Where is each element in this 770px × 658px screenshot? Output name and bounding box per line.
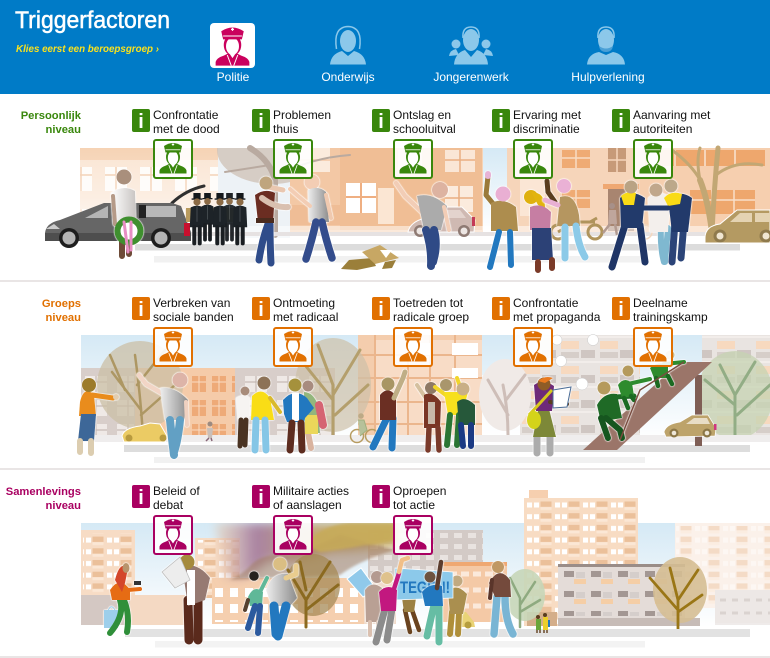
figure: child: [245, 571, 267, 633]
info item: Militaire acties of aanslagen: of aanslagen: [273, 498, 342, 512]
info item: Deelname trainingskamp: trainingskamp: [633, 310, 708, 324]
divider: [0, 280, 770, 282]
info item: Confrontatie met propaganda: [492, 296, 601, 366]
info item: Confrontatie met de dood: [132, 108, 220, 178]
figure: man blue with brown jacket: [373, 372, 405, 448]
figure: woman in orange: [78, 378, 119, 453]
distant walker: [603, 203, 617, 235]
far low building: [715, 590, 770, 623]
info item: Problemen thuis: i: [258, 111, 264, 133]
info item: Ontmoeting met radicaal: met radicaal: [273, 310, 338, 324]
panel: samenlevings niveau: [6, 484, 770, 648]
info item: Confrontatie met de dood: i: [138, 111, 144, 133]
street scene background row 2: [81, 335, 770, 440]
tree row 3 tan: [286, 554, 340, 627]
ramp: [583, 362, 712, 450]
info item: Ervaring met discriminatie: [492, 108, 582, 178]
info item: Militaire acties of aanslagen: [252, 484, 349, 554]
tab: Politie: Politie: [217, 70, 250, 84]
distant walker: [206, 422, 213, 441]
figure: brown protester in back: [402, 594, 419, 632]
info item: Aanvaring met autoriteiten: i: [618, 111, 624, 133]
info item: Verbreken van sociale banden: sociale banden: [153, 310, 234, 324]
level label: groeps: Groeps: [42, 298, 81, 310]
info item: Ervaring met discriminatie: discriminatie: [513, 122, 580, 136]
tab: Politie: [210, 23, 255, 84]
tree row 2 grey: [479, 359, 531, 435]
figure group: three people talking: [236, 376, 323, 450]
info item: Deelname trainingskamp: i: [618, 299, 624, 321]
info item: Ontslag en schooluitval: Ontslag en: [393, 108, 451, 122]
ground stripes row 1: [135, 232, 770, 262]
info item: Confrontatie met de dood: Confrontatie: [153, 108, 219, 122]
info item: Ervaring met discriminatie: Ervaring met: [513, 108, 582, 122]
panel: groeps niveau: [42, 296, 770, 463]
level label: persoonlijk: Persoonlijk: [21, 110, 82, 122]
car: tan row 2: [664, 415, 716, 438]
figure: waving man grey: [396, 182, 449, 266]
tab: Hulpverlening: [571, 27, 645, 84]
info item: Confrontatie met de dood: met de dood: [153, 122, 220, 136]
info item: Confrontatie met propaganda: i: [498, 299, 504, 321]
info item: Deelname trainingskamp: Deelname: [633, 296, 688, 310]
info item: Confrontatie met propaganda: Confrontatie: [513, 296, 579, 310]
green tree row 3: [505, 569, 545, 627]
figure: man reading newspaper: [162, 554, 210, 640]
info item: Ontmoeting met radicaal: Ontmoeting: [273, 296, 335, 310]
info item: Beleid of debat: debat: [153, 498, 184, 512]
low apartment block: [558, 564, 700, 626]
figure: woman with tablet: [527, 377, 571, 453]
level label: persoonlijk: niveau: [46, 124, 81, 136]
panel: persoonlijk niveau: [21, 108, 770, 270]
info item: Aanvaring met autoriteiten: Aanvaring met: [633, 108, 711, 122]
info item: Ontmoeting met radicaal: [252, 296, 338, 366]
street scene background row 3: [81, 523, 770, 627]
data bubbles: [552, 334, 598, 390]
info item: Militaire acties of aanslagen: i: [258, 487, 264, 509]
protest sign TEGEN: TEGEN!: [400, 578, 450, 597]
figure: man in blue: [422, 562, 443, 642]
info item: Ontslag en schooluitval: i: [378, 111, 384, 133]
hearse: [45, 186, 204, 248]
divider: [0, 656, 770, 658]
divider: [0, 468, 770, 470]
instruction: Klies eerst een beroepsgroep ›: [16, 43, 159, 55]
title: Triggerfactoren: [15, 7, 170, 34]
car: tan right: [705, 210, 770, 243]
info item: Oproepen tot actie: [372, 484, 446, 554]
info item: Beleid of debat: Beleid of: [153, 484, 200, 498]
ground stripes row 2: [81, 435, 770, 463]
level label: groeps: niveau: [46, 312, 81, 324]
info item: Problemen thuis: Problemen: [273, 108, 331, 122]
protest sign TEGEN: [394, 568, 453, 600]
info item: Deelname trainingskamp: [612, 296, 708, 366]
info item: Oproepen tot actie: i: [378, 487, 384, 509]
info item: Ontslag en schooluitval: schooluitval: [393, 122, 456, 136]
figure: man tan with raised arm: [545, 179, 585, 258]
tab: Jongerenwerk: [433, 27, 510, 84]
figure: woman in pink: [376, 558, 408, 642]
figure: woman with headscarf: [524, 190, 553, 270]
car: silver background car: [408, 207, 475, 237]
ground stripes row 3: [125, 629, 750, 648]
brown tree row 3: [650, 557, 707, 629]
info item: Militaire acties of aanslagen: Militaire acties: [273, 484, 349, 498]
info item: Problemen thuis: thuis: [273, 122, 298, 136]
climbers on ramp: [597, 350, 684, 440]
scattered papers: [341, 245, 399, 270]
info item: Beleid of debat: i: [138, 487, 144, 509]
tree row 2 left: [97, 341, 183, 437]
info item: Verbreken van sociale banden: [132, 296, 234, 366]
figure: man in brown: [489, 561, 513, 634]
figure: arguing man grey: [290, 174, 332, 259]
info item: Toetreden tot radicale groep: i: [378, 299, 384, 321]
tree row 1 right: [672, 148, 762, 232]
info item: Oproepen tot actie: Oproepen: [393, 484, 446, 498]
info item: Verbreken van sociale banden: Verbreken van: [153, 296, 230, 310]
info item: Ontmoeting met radicaal: i: [258, 299, 264, 321]
info item: Toetreden tot radicale groep: radicale groep: [393, 310, 469, 324]
figure: man with wreath: [111, 170, 140, 256]
children walking: [536, 613, 550, 633]
info item: Oproepen tot actie: tot actie: [393, 498, 435, 512]
tree row 2 green: [697, 351, 770, 439]
figure group: police and person: [612, 180, 692, 267]
info item: Verbreken van sociale banden: i: [138, 299, 144, 321]
figure group: radical group: [417, 378, 475, 450]
figure: waving man tan: [486, 174, 518, 267]
info item: Aanvaring met autoriteiten: autoriteiten: [633, 122, 692, 136]
tower central: [524, 490, 638, 626]
tab: Onderwijs: [321, 26, 375, 84]
tree row 2 middle: [295, 338, 371, 438]
figure: woman with headscarf and bag: [104, 563, 141, 633]
tab: Hulpverlening: Hulpverlening: [571, 70, 645, 84]
info item: Problemen thuis: [252, 108, 331, 178]
bicycles and moped: [551, 215, 689, 239]
figure: woman in grey-brown coat: [365, 571, 383, 635]
figure: waving man: [139, 372, 188, 455]
header band: [0, 0, 770, 94]
info item: Ontslag en schooluitval: [372, 108, 456, 178]
info item: Beleid of debat: [132, 484, 200, 554]
figure: man waving by smoke: [266, 557, 297, 636]
level label: samenlevings: Samenlevings: [6, 486, 81, 498]
car: yellow row 3: [455, 612, 475, 628]
street scene background row 1: [80, 148, 770, 238]
info item: Ervaring met discriminatie: i: [498, 111, 504, 133]
tab: Jongerenwerk: Jongerenwerk: [433, 70, 510, 84]
figure: tan man: [448, 576, 467, 634]
tab: Onderwijs: Onderwijs: [321, 70, 375, 84]
info item: Toetreden tot radicale groep: Toetreden tot: [393, 296, 464, 310]
info item: Confrontatie met propaganda: met propaganda: [513, 310, 601, 324]
sign: blue square: [347, 568, 377, 597]
car: yellow: [122, 423, 167, 442]
coffin with pallbearers: [186, 193, 247, 243]
figure: arguing man brown: [255, 176, 288, 263]
level label: samenlevings: niveau: [46, 500, 81, 512]
info item: Aanvaring met autoriteiten: [612, 108, 711, 178]
info item: Toetreden tot radicale groep: [372, 296, 469, 366]
tree row 1 left: [225, 148, 350, 235]
bicycle rider: [350, 413, 378, 442]
smoke cloud: [215, 523, 400, 580]
